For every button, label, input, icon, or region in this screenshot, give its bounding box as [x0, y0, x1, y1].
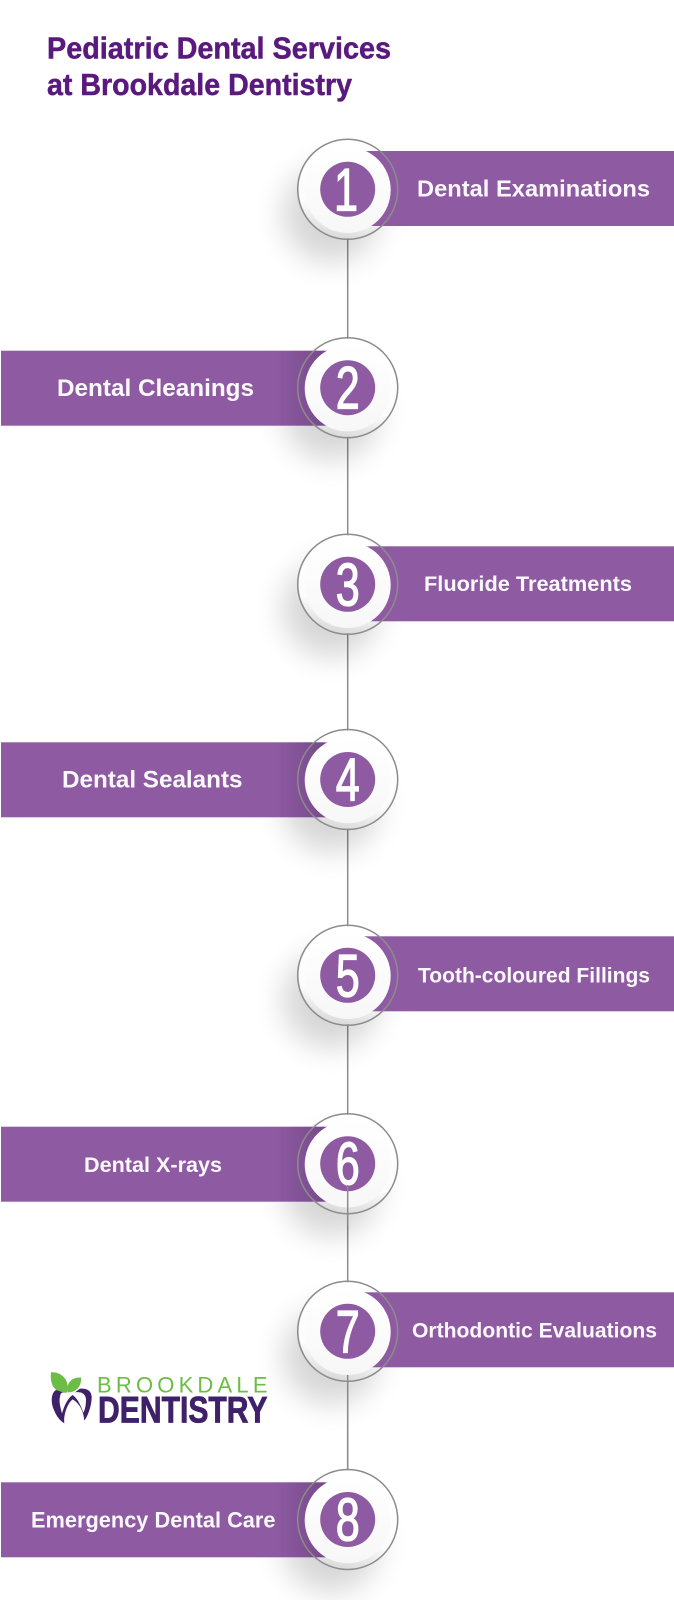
number 2: 2 — [336, 356, 360, 422]
banner 2 — [1, 351, 350, 426]
step 2: Dental Cleanings — [1, 338, 398, 460]
label 4: Dental Sealants — [62, 766, 242, 793]
label 8: Emergency Dental Care — [31, 1507, 276, 1532]
connector segment below circle 7 — [347, 1375, 349, 1475]
label 1: Dental Examinations — [417, 175, 650, 201]
title — [47, 31, 391, 102]
logo wordmark: BROOKDALE: BROOKDALE — [97, 1373, 268, 1398]
number 7: 7 — [336, 1300, 360, 1366]
label 2: Dental Cleanings — [57, 375, 254, 402]
label 3: Fluoride Treatments — [424, 572, 632, 596]
banner 3 — [345, 546, 674, 621]
label 7: Orthodontic Evaluations — [412, 1319, 657, 1342]
number 8: 8 — [336, 1488, 360, 1554]
icon: leaves — [51, 1372, 81, 1393]
banner 6 — [1, 1127, 350, 1202]
step 3: Fluoride Treatments — [283, 534, 674, 657]
connector segment overlapping circle 6 — [347, 1185, 349, 1225]
label 5: Tooth-coloured Fillings — [418, 964, 650, 987]
title: Pediatric Dental Services — [47, 31, 391, 65]
banner 8 — [1, 1482, 350, 1557]
banner 1 — [345, 151, 674, 226]
logo: Brookdale Dentistry — [51, 1372, 268, 1430]
step 4: Dental Sealants — [1, 730, 398, 852]
number 6: 6 — [336, 1132, 360, 1198]
number 5: 5 — [336, 944, 360, 1010]
step 8: Emergency Dental Care — [1, 1470, 398, 1592]
number 3: 3 — [336, 553, 360, 619]
banner 4 — [1, 742, 350, 817]
step 1: Dental Examinations — [283, 139, 674, 262]
step 5: Tooth-coloured Fillings — [283, 925, 674, 1048]
title: at Brookdale Dentistry — [47, 68, 352, 102]
logo wordmark: DENTISTRY: DENTISTRY — [98, 1389, 268, 1430]
banner 7 — [345, 1292, 674, 1367]
vertical connector line — [347, 230, 349, 1475]
number 4: 4 — [336, 748, 360, 814]
banner 5 — [345, 936, 674, 1011]
step 6: Dental X-rays — [1, 1114, 398, 1236]
label 6: Dental X-rays — [84, 1153, 222, 1177]
step 7: Orthodontic Evaluations — [283, 1281, 674, 1404]
number 1: 1 — [334, 158, 358, 224]
icon: tooth — [52, 1389, 92, 1423]
